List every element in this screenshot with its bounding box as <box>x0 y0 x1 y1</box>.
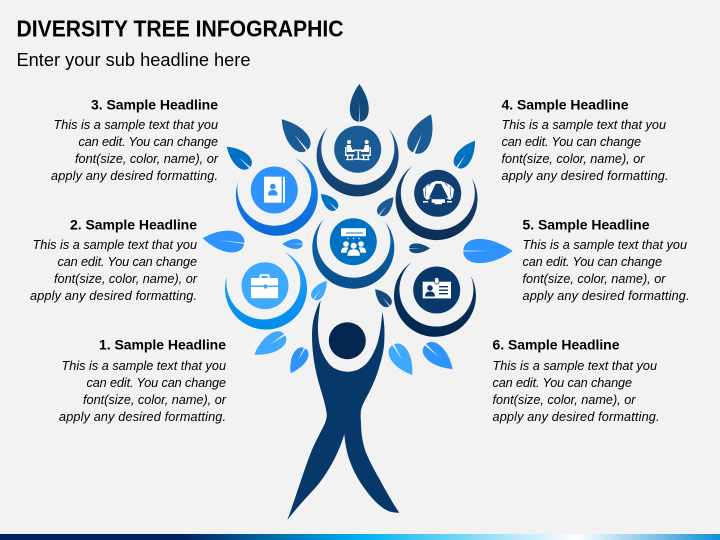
crescent and icon: ID card (bottom right) <box>394 262 476 337</box>
bottom gradient bar <box>0 534 720 540</box>
text block 5: can edit. You can change <box>522 255 662 269</box>
leaves <box>201 84 513 380</box>
person: trunk of the tree <box>287 300 399 520</box>
text block 5: 5. Sample Headline <box>522 216 650 232</box>
text block 1: This is a sample text that you <box>62 359 226 373</box>
text block 6 <box>492 336 660 424</box>
text block 6: font(size, color, name), or <box>492 393 636 407</box>
text block 4: can edit. You can change <box>502 135 641 149</box>
crescent and icon: briefcase (bottom left) <box>225 252 307 330</box>
text block 2: 2. Sample Headline <box>70 216 197 232</box>
text block 6: This is a sample text that you <box>492 359 657 373</box>
text block 4: apply any desired formatting. <box>502 169 668 183</box>
title: DIVERSITY TREE INFOGRAPHIC <box>16 16 344 42</box>
text block 3: 3. Sample Headline <box>91 96 218 112</box>
crescent and icon: contact book (top left) <box>236 158 318 236</box>
person head <box>329 322 366 359</box>
text block 5: This is a sample text that you <box>522 238 687 252</box>
text block 2: This is a sample text that you <box>32 238 197 252</box>
subtitle: Enter your sub headline here <box>16 50 250 70</box>
text block 1: can edit. You can change <box>86 376 226 390</box>
crescent and icon: team discussion (centre) <box>312 218 394 289</box>
text block 3 <box>51 96 219 183</box>
text block 3: can edit. You can change <box>78 135 218 149</box>
text block 6: 6. Sample Headline <box>492 336 620 352</box>
text block 4: font(size, color, name), or <box>502 152 645 166</box>
text block 5: apply any desired formatting. <box>522 289 690 303</box>
text block 4 <box>502 96 668 183</box>
text block 1: 1. Sample Headline <box>99 336 226 352</box>
text block 6: apply any desired formatting. <box>492 410 660 424</box>
text block 2: font(size, color, name), or <box>54 272 198 286</box>
text block 2: apply any desired formatting. <box>30 289 197 303</box>
text block 3: font(size, color, name), or <box>75 152 219 166</box>
text block 2 <box>30 216 198 303</box>
text block 2: can edit. You can change <box>58 255 197 269</box>
text block 1 <box>59 336 227 424</box>
crescent and icon: conference table (top right) <box>396 166 478 240</box>
text block 4: This is a sample text that you <box>502 118 666 132</box>
text block 1: font(size, color, name), or <box>83 393 227 407</box>
crescent and icon: meeting (top) <box>317 126 399 196</box>
text block 5 <box>522 216 690 303</box>
text block 3: apply any desired formatting. <box>51 169 218 183</box>
text block 4: 4. Sample Headline <box>502 96 629 112</box>
text block 5: font(size, color, name), or <box>522 272 666 286</box>
text block 3: This is a sample text that you <box>54 118 218 132</box>
text block 6: can edit. You can change <box>492 376 632 390</box>
text block 1: apply any desired formatting. <box>59 410 226 424</box>
